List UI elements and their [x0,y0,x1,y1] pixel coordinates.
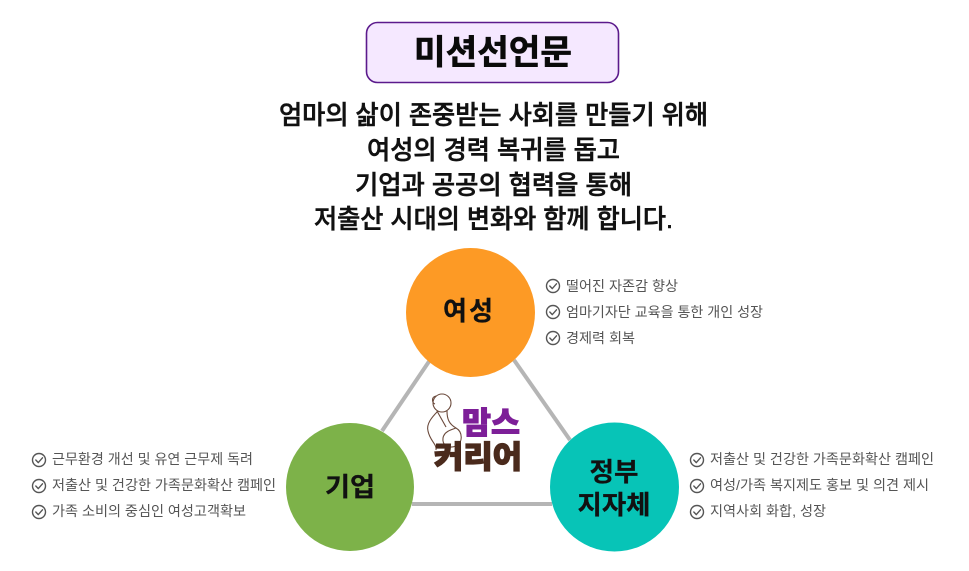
mission statement text: 엄마의 삶이 존중받는 사회를 만들기 위해 [279,100,708,130]
mission statement text: 기업과 공공의 협력을 통해 [355,170,632,200]
logo: 맘스 커리어 [428,394,522,475]
triangle connector lines [382,360,570,504]
mission statement text [279,100,708,234]
item: 엄마기자단 교육을 통한 개인 성장 [566,304,763,320]
logo: 맘스 커리어: 맘스 [462,406,520,441]
circle: 정부 지자체 [550,422,679,552]
circle: 여성 [406,248,535,377]
circle: 정부 지자체: 지자체 [578,490,650,520]
list: 정부 지자체 [690,451,934,519]
list: 여성 [546,278,763,346]
item: 경제력 회복 [566,330,635,346]
title badge [366,22,618,82]
circle: 기업: 기업 [325,472,375,502]
item: 가족 소비의 중심인 여성고객확보 [52,503,246,519]
item: 떨어진 자존감 향상 [566,278,678,294]
item: 저출산 및 건강한 가족문화확산 캠페인 [710,451,934,467]
item: 지역사회 화합, 성장 [710,503,826,519]
circle: 정부 지자체: 정부 [590,457,638,487]
title badge: 미션선언문 [414,34,572,72]
list: 기업 [32,451,276,519]
item: 저출산 및 건강한 가족문화확산 캠페인 [52,477,276,493]
icon: mother and baby [428,394,461,450]
circle: 여성: 여성 [443,296,493,326]
mission statement text: 저출산 시대의 변화와 함께 합니다. [314,204,673,234]
item: 근무환경 개선 및 유연 근무제 독려 [52,451,253,467]
item: 여성/가족 복지제도 홍보 및 의견 제시 [710,477,929,493]
mission statement text: 여성의 경력 복귀를 돕고 [367,135,620,165]
circle: 기업 [286,423,414,551]
logo: 맘스 커리어: 커리어 [434,440,522,475]
